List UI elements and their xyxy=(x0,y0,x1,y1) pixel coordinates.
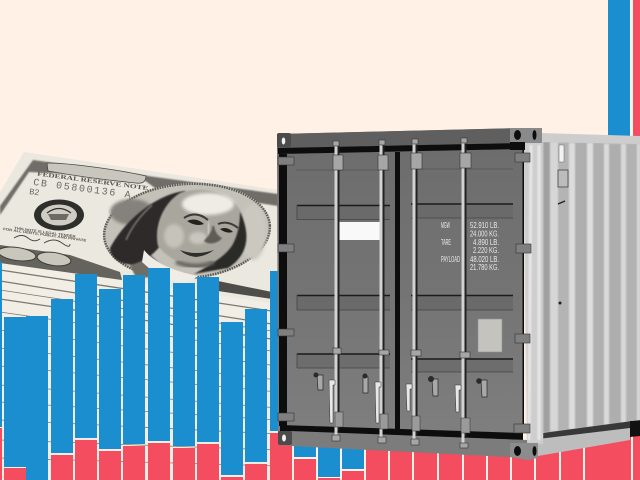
note text block: CB 05800136 A xyxy=(32,178,131,202)
coat xyxy=(126,250,172,278)
Franklin portrait xyxy=(100,177,274,285)
rubbed sticker xyxy=(478,319,502,352)
bottom sill xyxy=(290,431,527,458)
door locking rods xyxy=(336,142,466,444)
mouth xyxy=(180,250,214,257)
shipping container xyxy=(277,128,640,460)
nose xyxy=(204,226,222,243)
lower numeral band xyxy=(0,245,272,299)
corrugation xyxy=(543,142,640,432)
top-right bar chart fragment xyxy=(608,0,640,137)
oval xyxy=(100,177,274,285)
hundred dollar bill stack xyxy=(0,152,278,480)
treasury seal xyxy=(34,200,84,230)
red bars xyxy=(0,428,640,480)
note text block: B2 xyxy=(29,187,40,198)
note text block xyxy=(3,172,149,246)
top beam xyxy=(277,128,523,150)
door hinges xyxy=(278,153,531,433)
note text block: FOR ALL DEBTS, PUBLIC AND PRIVATE xyxy=(3,227,88,243)
forehead highlight xyxy=(182,193,234,215)
roof rail xyxy=(540,133,640,144)
weight plate text: 21.780 KG. xyxy=(470,263,499,272)
eyes and brows xyxy=(184,214,238,233)
note text block: THIS NOTE IS LEGAL TENDER xyxy=(14,226,76,239)
left hair xyxy=(110,191,186,264)
weight plate text xyxy=(441,221,499,272)
blue bars xyxy=(0,262,364,480)
engraved top band xyxy=(0,160,278,215)
weight plate text: 52.910 LB. xyxy=(470,221,499,230)
speck xyxy=(558,302,562,304)
weight plate text: 24.000 KG. xyxy=(470,230,499,238)
white label xyxy=(339,222,380,240)
note text block: FEDERAL RESERVE NOTE xyxy=(37,172,149,192)
bottom rail xyxy=(543,420,640,439)
right hair and jaw shadow xyxy=(194,212,246,274)
note face xyxy=(0,152,278,304)
locking handles xyxy=(314,372,487,433)
corner castings xyxy=(277,128,542,460)
top numeral band xyxy=(47,163,146,183)
black frame lines xyxy=(278,143,524,440)
bar chart xyxy=(0,262,640,480)
weight plate text: 48.020 LB. xyxy=(470,255,499,264)
container side wall xyxy=(523,133,640,458)
corner post xyxy=(523,140,543,444)
face xyxy=(157,190,243,268)
weight plate text: 4.890 LB. xyxy=(473,238,499,247)
door face xyxy=(277,128,523,457)
weight plate text: TARE xyxy=(441,238,451,247)
weight plate text: PAYLOAD xyxy=(441,255,460,264)
weight plate text: MGW xyxy=(441,221,450,230)
stack of note edges xyxy=(0,240,278,480)
weight plate text: 2.220 KG. xyxy=(473,246,499,255)
rod brackets xyxy=(332,138,471,448)
side latch box xyxy=(558,145,568,204)
cravat xyxy=(142,250,198,284)
door ribs xyxy=(296,169,513,372)
